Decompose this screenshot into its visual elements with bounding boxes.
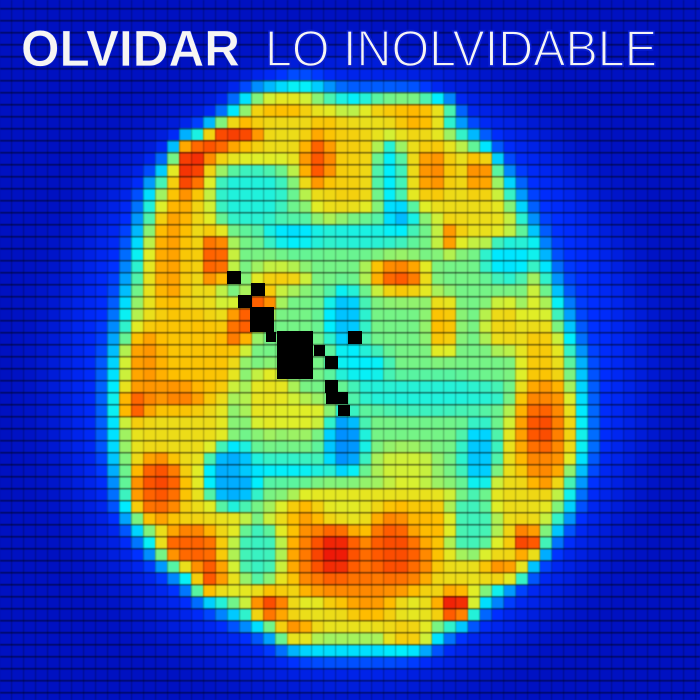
frontal interior — [212, 160, 530, 520]
title: light words: LO INOLVIDABLE — [265, 20, 657, 77]
occipital — [289, 510, 361, 600]
title: bold word: OLVIDAR — [21, 20, 240, 77]
lower hot spots — [254, 592, 286, 620]
left temporal — [137, 310, 233, 410]
right temporal — [517, 370, 569, 490]
yellow interior — [328, 123, 372, 207]
warm frontal band — [172, 170, 190, 300]
title — [21, 20, 657, 77]
black lesion cells — [227, 271, 362, 416]
warm centre — [368, 262, 428, 284]
lower left — [132, 454, 184, 522]
cool regions — [212, 163, 288, 227]
